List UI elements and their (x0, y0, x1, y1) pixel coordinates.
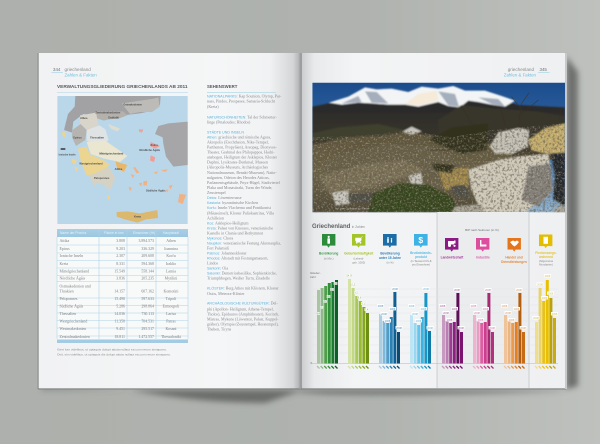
label: Bruttoinlandsprodukt: produkt (415, 255, 428, 259)
table of provinces: Zentralmakedonien (60, 335, 90, 339)
chart: Bevölkerung unter 15 Jahre: 2008 (396, 326, 402, 330)
label: Geburtenhäufigkeit: geb. 1000) (352, 260, 365, 264)
chart: Flexionsangewohnend: 2008 (533, 316, 539, 320)
chart: Bevölkerung unter 15 Jahre: 2008 (392, 287, 398, 291)
table of provinces: Südliche Ägäis (60, 303, 84, 308)
table of provinces: Name der Provinz (60, 231, 87, 235)
text: Sehenswert list: Delos: Löwenterrasse (207, 195, 242, 200)
right page (300, 53, 567, 389)
panel: BIP nach Sektoren (437, 212, 529, 388)
text: Sehenswert list: Kreta: Palast von Knossos, venezianische (207, 225, 273, 231)
chart: Handel und Dienstleistungen: 2008 (516, 288, 522, 292)
chart: Flexionsangewohnend: 2008 (552, 312, 558, 316)
table of provinces: Tripoli (166, 297, 176, 301)
table of provinces (57, 229, 188, 343)
table of provinces: 3.894.573 (138, 239, 154, 243)
text: Sehenswert list: KLÖSTER: Berg Athos mit Klöstern, Kloster (207, 286, 279, 292)
chart: Flexionsangewohnend: 2008 (545, 274, 551, 278)
table of provinces: Patras (166, 319, 176, 323)
chart: Flexionsangewohnend: 2008 (542, 296, 548, 300)
text: Sehenswert list: ansbogen, Heiligtum der Asklepios, Kloster (207, 155, 278, 161)
chart: Bevölkerung: 10,1 (319, 306, 325, 310)
table of provinces: 730.113 (142, 312, 154, 316)
table of provinces: 15.490 (114, 297, 125, 301)
chart: Geburtenhäufigkeit: 9,2 (354, 291, 358, 295)
text: Sehenswert list: Athen: griechische und römische Agora, (207, 134, 271, 140)
map of Greece: Südliche Ägäis (146, 188, 166, 192)
table of provinces: 298.864 (141, 304, 154, 308)
chart: Bevölkerung unter 15 Jahre (377, 287, 402, 368)
icon: Bevölkerung (322, 234, 335, 248)
chart: Handel und Dienstleistungen: 2008 (502, 304, 508, 308)
chart: Bruttoinlandsprodukt: 2008 (412, 312, 418, 316)
text: Sehenswert list: linge (Petaloudes; Rhodos) (207, 120, 251, 125)
table of provinces: Nördliche Ägäis (60, 276, 86, 281)
map of Greece: Ostmakedonien (123, 104, 142, 107)
heading: Sehenswert: SEHENSWERT (207, 84, 238, 89)
page header right: 345 (540, 67, 547, 72)
table of provinces: Komotini (164, 289, 178, 293)
text: Sehenswert list: (Mäuseinsel), Kloster Paliokastritsa, Villa (207, 210, 274, 216)
text: Sehenswert list: Fort Palamidi (207, 246, 230, 251)
map of Greece: Albes. (80, 116, 88, 120)
page header right: Zahlen & Fakten (504, 73, 537, 78)
table of provinces: Epirus (60, 247, 70, 251)
photo: mountain landscape (312, 83, 565, 212)
icon: Flexionsangewohnend (539, 234, 552, 248)
table of provinces: Lamia (166, 269, 176, 273)
table of provinces: Thessalien (60, 312, 76, 316)
table of provinces: 8.331 (116, 262, 125, 266)
chart: Bruttoinlandsprodukt: 2008 (416, 319, 422, 323)
page header left: griechenland (64, 67, 91, 72)
page header left: Zahlen & Fakten (64, 73, 97, 78)
text: Sehenswert list: Patmos: Johanneskloster (207, 251, 247, 256)
label: Handel (501, 256, 527, 264)
text: Sehenswert list: Mistras, Mykene (Löwentor, Palast, Kuppel- (207, 316, 279, 322)
table of provinces: 11.350 (114, 319, 125, 323)
table of provinces: 18.811 (114, 335, 125, 339)
label: Bevölkerung unter 15: (in %) (386, 260, 394, 264)
chart: Handel und Dienstleistungen: 2008 (505, 311, 511, 315)
table of provinces: Attika (60, 239, 69, 243)
chart: Bevölkerung: 11,3 (333, 282, 338, 286)
heading: BIP nach Sektoren: BIP nach Sektoren (in %) (465, 228, 499, 232)
table caption (57, 348, 171, 356)
chart: Bevölkerung: 10,2 (322, 300, 328, 304)
label: Flexionsangewohnend (535, 251, 557, 266)
text: Sehenswert list: (Akropolis-Museum, Archäologisches (207, 165, 269, 171)
chart: Bevölkerung unter 15 Jahre: 2008 (378, 304, 384, 308)
chart: Landwirtschaft: 2008 (443, 311, 449, 315)
table of provinces: Mytilini (165, 277, 177, 281)
icon: Handel (508, 238, 521, 252)
text: Sehenswert list: Akropolis (Erechtheion, Nike-Tempel, (207, 139, 269, 145)
table of provinces: 15.549 (114, 269, 125, 273)
chart: Geburtenhäufigkeit: 10,2 (350, 283, 356, 287)
heading: Griechenland in Zahlen: Griechenland in Zahlen (312, 224, 365, 230)
label: Geburtenhäufigkeit (344, 252, 374, 264)
text: Sehenswert list (207, 93, 282, 332)
table of provinces: Fläche in km² (104, 231, 125, 235)
chart: Landwirtschaft: 2008 (440, 304, 446, 308)
text: Sehenswert list: NATIONALPARKS: Kap Sounion, Olymp, Par- (207, 93, 282, 99)
label: Geburtenhäufigkeit: Geburtenhäufigkeit (344, 252, 374, 256)
chart: Bevölkerung: 9,4 (316, 312, 320, 316)
table of provinces: 594.368 (141, 262, 154, 266)
axis labels: zahl (310, 275, 316, 279)
axis labels: Glieder- (310, 271, 321, 275)
text: Sehenswert list: STÄDTE UND INSELN (207, 131, 244, 135)
chart: Landwirtschaft: 2008 (458, 326, 464, 330)
table of provinces: 14.036 (114, 312, 125, 316)
axis labels: 0 (310, 361, 312, 365)
icon: Industrie (476, 238, 489, 252)
map of Greece: Attika (115, 167, 123, 171)
text: Sehenswert list: nalgarten, Odeion des Herodes Atticus, (207, 175, 270, 181)
chart: Handel und Dienstleistungen: 2008 (514, 307, 520, 311)
label: Landwirtschaft: Landwirtschaft (441, 256, 464, 260)
chart: Bruttoinlandsprodukt (408, 287, 434, 368)
table of provinces: Korfu (166, 254, 176, 258)
text: Sehenswert list: Kastoria: byzantinische Kirchen (207, 200, 258, 205)
icon: Landwirtschaft (445, 238, 458, 252)
table of provinces: 295.517 (141, 327, 154, 331)
chart: Flexionsangewohnend: 2008 (537, 282, 543, 286)
map of Greece: Nördliche Ägäis (139, 148, 161, 152)
map of Greece: Epirus (73, 136, 82, 140)
table of provinces: Iraklio (166, 262, 176, 266)
page header left (52, 67, 97, 78)
text: Sehenswert list: Kastelle in Chania und Rethymnon (207, 230, 263, 235)
map of Greece: Kreta (134, 214, 141, 218)
text: Sehenswert list: (Kreta) (207, 104, 219, 109)
chart: Bevölkerung unter 15 Jahre: 2008 (381, 312, 387, 316)
table of provinces: Mittelgriechenland (60, 269, 89, 273)
text: Sehenswert list: Theater, Grabmal des Philopappos, Hadri- (207, 149, 275, 155)
text: Sehenswert list: Nauplion: venezianische Festung Akronauplia, (207, 241, 281, 247)
chart: Geburtenhäufigkeit (346, 274, 369, 368)
label: Handel: Dienstleistungen (501, 260, 527, 264)
map of Greece: Chalkidiki (108, 117, 119, 119)
text: Sehenswert list: Osios, Meteora-Klöster (207, 291, 245, 297)
table of provinces: Larisa (166, 312, 176, 316)
text: Sehenswert list: Zeustempel (207, 190, 227, 195)
chart: Industrie: 2008 (485, 288, 491, 292)
table of provinces: 9.451 (116, 327, 125, 331)
page header left: 344 (53, 67, 61, 72)
icon: Bruttoinlandsprodukt: $ (418, 235, 423, 245)
chart: Industrie (470, 288, 496, 368)
chart: Bevölkerung (316, 280, 338, 368)
text: Sehenswert list: Kos: Asklepios-Heiligtum (207, 220, 249, 225)
text: Sehenswert list: Triumphbogen, Weißer Turm, Zitadelle (207, 276, 270, 282)
axis labels (310, 271, 321, 365)
text: Sehenswert list: NATURSCHÖNHEITEN: Tal der Schmetter- (207, 115, 278, 120)
book shadow (42, 56, 578, 403)
table of provinces: 607.162 (141, 289, 154, 293)
label: Geburtenhäufigkeit: (Lebend- (353, 256, 364, 260)
label: Bevölkerung: (in Mio.) (324, 256, 334, 260)
text: Sehenswert list: Parlamentsgebäude, Pnyx-Hügel, Stadtviertel (207, 180, 281, 186)
label: Bevölkerung unter 15: Bevölkerung (380, 252, 400, 256)
chart: Geburtenhäufigkeit: 8,6 (358, 296, 362, 300)
label: Bruttoinlandsprodukt: (in Tausend US-$ (411, 259, 432, 263)
table of provinces: Einwohner (Hr) (133, 231, 155, 235)
chart: Bruttoinlandsprodukt: 2008 (409, 304, 415, 308)
label: Bruttoinlandsprodukt: Bruttoinlands- (410, 251, 432, 255)
icon: Bevölkerung unter 15 Jahre (383, 234, 397, 248)
text: Sehenswert list: Parthenon, Propyläen), Areopag, Dionysos- (207, 144, 277, 150)
map of Greece: Mittelgriechenland (99, 151, 124, 155)
table of provinces: Ermoupoli (163, 304, 179, 308)
table of provinces: 1.472.557 (138, 335, 154, 339)
chart: Bruttoinlandsprodukt: 2008 (421, 307, 427, 311)
chart: Industrie: 2008 (474, 311, 480, 315)
heading: Sehenswert (207, 84, 276, 92)
chart: Bevölkerung: 11,0 (330, 288, 335, 292)
chart: Landwirtschaft (439, 288, 464, 368)
photo: mountain landscape: Auf dem Gipfelgrat im Winter (335, 206, 369, 210)
chart: Bevölkerung unter 15 Jahre: 2008 (390, 307, 396, 311)
label: Industrie: Industrie (476, 256, 490, 260)
text: Sehenswert list: Saloniki: Demetriosbasilika, Sophienkirche, (207, 271, 277, 277)
table of provinces: Ioannina (164, 247, 178, 251)
chart: Flexionsangewohnend (532, 274, 558, 368)
chart: Flexionsangewohnend: 2008 (548, 291, 554, 295)
table of provinces: 597.633 (141, 297, 154, 301)
table of provinces: Peloponnes (60, 297, 78, 301)
map of Greece: Thessalien (90, 135, 104, 139)
text: Sehenswert list: Achilleion (207, 215, 224, 220)
label: Flexionsangewohnend: Flexionsange- (535, 251, 557, 255)
text: Sehenswert list: phi (Apollon- Heiligtum, Athena-Tempel, (207, 306, 274, 312)
chart: Industrie: 2008 (478, 318, 484, 322)
table of provinces: 336.329 (141, 247, 154, 251)
map of Greece: Ionische Inseln (59, 154, 76, 156)
chart: Landwirtschaft: 2008 (454, 288, 460, 292)
table of provinces: Ionische Inseln (60, 254, 83, 258)
text: Sehenswert list: Rhodos: Altstadt mit Festungsmauern, (207, 256, 268, 262)
chart: Bevölkerung: 10,9 (326, 295, 332, 299)
table of provinces: 14.157 (114, 289, 125, 293)
map of Greece (57, 96, 188, 224)
icon: Bruttoinlandsprodukt (414, 234, 428, 248)
chart: Landwirtschaft: 2008 (447, 318, 453, 322)
table caption: Ovit, sim videlibus, ut optaquis dis dolupt atiota nullaut ea cum rerum simaporro. (57, 352, 171, 356)
chart: Bevölkerung unter 15 Jahre: 2008 (385, 319, 391, 323)
table of provinces: Westgriechenland (60, 319, 87, 323)
table of provinces: 3.808 (116, 239, 125, 243)
page header right (504, 67, 550, 78)
label: Bruttoinlandsprodukt (410, 251, 432, 266)
table of provinces: 3.836 (116, 277, 125, 281)
chart: Industrie: 2008 (489, 326, 495, 330)
chart: Industrie: 2008 (483, 307, 489, 311)
map of Greece: Peloponnes (94, 176, 110, 180)
text: Sehenswert list: Daphni, Lysikrates-Denkmal, Museen (207, 160, 268, 166)
chart: Geburtenhäufigkeit: 7,4 (365, 308, 369, 312)
table of provinces: 9.203 (116, 247, 125, 251)
text: Sehenswert list: nass, Pindos, Prespasee, Samaria-Schlucht (207, 99, 276, 105)
map of Greece: Rodos (151, 145, 159, 147)
chart: Landwirtschaft: 2008 (452, 307, 458, 311)
table of provinces: 704.531 (141, 319, 154, 323)
table of provinces: 205.235 (141, 277, 154, 281)
label: Bevölkerung unter 15 (379, 252, 401, 264)
text: Sehenswert list: Theben, Tiryns (207, 326, 232, 332)
page header right: griechenland (508, 67, 534, 72)
chart: Handel und Dienstleistungen: 2008 (520, 326, 526, 330)
chart: Handel und Dienstleistungen (501, 288, 526, 368)
table of provinces: 558.144 (141, 269, 154, 273)
table of provinces: Kosani (165, 327, 177, 331)
text: Sehenswert list: Tholos), Epidauros (Amphitheater), Korinth, (207, 311, 279, 317)
table of provinces: Westmakedonien (60, 327, 86, 331)
map of Greece: Zentralmakedonien (95, 110, 121, 114)
table of provinces: Kreta (60, 262, 68, 266)
label: Handel: Handel und (505, 256, 523, 260)
label: Bevölkerung (319, 252, 338, 260)
chart: Bruttoinlandsprodukt: 2008 (423, 287, 429, 291)
text: Sehenswert list: Korfu: Inseln Vlacherna und Pontikonisi (207, 205, 272, 210)
icon: Geburtenhäufigkeit (352, 234, 365, 248)
text: Sehenswert list: Nationalmuseum, Benaki-Museum), Natio- (207, 170, 277, 176)
label: Bevölkerung: Bevölkerung (319, 252, 338, 256)
left page (38, 53, 301, 389)
label: Flexionsangewohnend: wohnend (538, 255, 553, 259)
chart: Industrie: 2008 (471, 304, 477, 308)
chart: Geburtenhäufigkeit: 8,1 (361, 302, 365, 306)
label: Flexionsangewohnend: (Allgemeine (539, 259, 554, 263)
table of provinces: Ostmakedonien und (60, 284, 91, 288)
text: Sehenswert list: Plaka und Monastiraki, Turm der Winde, (207, 185, 272, 191)
table of provinces: 5.286 (116, 304, 125, 308)
chart: Bruttoinlandsprodukt: 2008 (427, 326, 433, 330)
text: Sehenswert list: Santorin: Oia (207, 266, 228, 271)
chart grid (312, 289, 558, 364)
table caption: Gent lum videlibus, ut optaquis dolupt atiota nullaut ea cum rerum simaporro. (57, 348, 167, 352)
table of provinces: Thrakien (60, 289, 74, 293)
text: Sehenswert list: Lindos (207, 261, 219, 266)
label: Bevölkerung unter 15: unter 15 Jahre (379, 256, 401, 260)
heading: Verwaltungsgliederung (57, 84, 188, 92)
label: Flexionsangewohnend: Mundarten) (539, 262, 553, 266)
text: Sehenswert list: Mykonos: Chora (207, 235, 233, 240)
table of provinces: Hauptstadt (163, 231, 179, 235)
table of provinces: Athen (166, 239, 176, 243)
heading: Verwaltungsgliederung: VERWALTUNGSGLIEDERUNG GRIECHENLANDS AB 2011 (57, 84, 188, 89)
text: Sehenswert list: ARCHÄOLOGISCHE KULTURGÜTER: Del- (207, 301, 278, 306)
table of provinces: 2.307 (116, 254, 125, 258)
table of provinces: Thessaloniki (161, 335, 181, 339)
text: Sehenswert list: gräber), Olympia (Zeustempel, Heratempel), (207, 321, 279, 327)
label: Bruttoinlandsprodukt: pro Einwohner) (412, 262, 430, 266)
chart: Geburtenhäufigkeit: 14,9 (346, 274, 352, 278)
table of provinces: 209.608 (141, 254, 154, 258)
map of Greece: Westgriechenland (79, 162, 103, 166)
chart: Handel und Dienstleistungen: 2008 (509, 318, 515, 322)
